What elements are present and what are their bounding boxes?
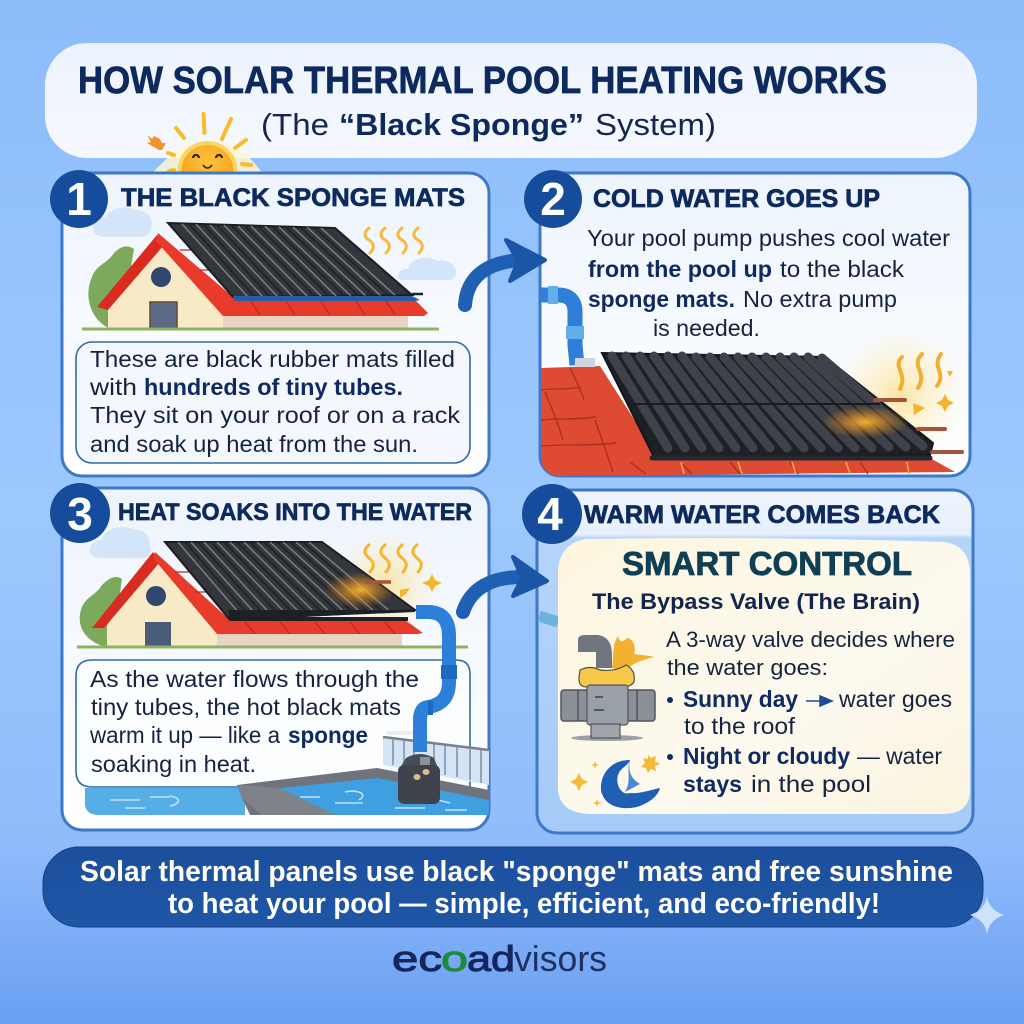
logo: ecoadvisors: visors bbox=[514, 938, 607, 979]
title: HOW SOLAR THERMAL POOL HEATING WORKS bbox=[78, 60, 887, 102]
flames bbox=[899, 354, 941, 389]
valve explanation: to the roof bbox=[684, 713, 796, 739]
red roof bbox=[541, 366, 955, 476]
body text 2 bbox=[587, 225, 950, 341]
valve explanation bbox=[666, 627, 955, 797]
badge 3 bbox=[50, 483, 110, 543]
text box 3: tiny tubes, the hot black mats bbox=[91, 694, 401, 720]
valve explanation: in the pool bbox=[751, 771, 871, 797]
house illustration bbox=[77, 542, 468, 647]
card title: SMART CONTROL bbox=[622, 545, 912, 582]
text box 3: warm it up — like a bbox=[89, 722, 280, 748]
heading 4: WARM WATER COMES BACK bbox=[584, 501, 940, 529]
logo: ecoadvisors: ad bbox=[467, 938, 515, 979]
card subtitle: The Bypass Valve (The Brain) bbox=[592, 589, 920, 614]
pump bbox=[398, 754, 440, 804]
badge 2: 2 bbox=[540, 173, 566, 225]
cloud bbox=[90, 527, 151, 558]
solar mat panel bbox=[602, 353, 962, 459]
badge 4 bbox=[522, 484, 582, 544]
badge 2 bbox=[524, 170, 582, 228]
text box 1: They sit on your roof or on a rack bbox=[90, 402, 461, 428]
valve explanation: water goes bbox=[838, 686, 952, 712]
subtitle bbox=[261, 107, 716, 142]
valve explanation: the water goes: bbox=[667, 655, 828, 680]
subtitle: System) bbox=[595, 107, 716, 142]
body text 2: to the black bbox=[780, 256, 905, 282]
text box 3 bbox=[76, 660, 470, 787]
body text 2: No extra pump bbox=[743, 286, 897, 312]
body text 2: is needed. bbox=[653, 315, 760, 341]
valve explanation: A 3-way valve decides where bbox=[666, 627, 955, 652]
arrow: step 1 to step 2 bbox=[465, 240, 545, 305]
subtitle: (The bbox=[261, 107, 329, 142]
cloud left bbox=[93, 208, 152, 237]
valve explanation: Night or cloudy bbox=[683, 743, 850, 769]
arrow: step 3 to step 4 bbox=[463, 557, 547, 612]
text box 3: sponge bbox=[288, 722, 368, 748]
panel 2: cold water goes up bbox=[524, 170, 970, 476]
valve explanation: Sunny day bbox=[683, 686, 798, 712]
return pipe bbox=[416, 612, 457, 752]
heading 1: THE BLACK SPONGE MATS bbox=[121, 184, 465, 212]
sparkle bbox=[400, 574, 442, 598]
heat glow bbox=[330, 530, 440, 640]
subtitle: “Black Sponge” bbox=[339, 107, 584, 142]
header panel bbox=[45, 43, 977, 158]
moon icon bbox=[570, 755, 660, 808]
valve explanation: stays bbox=[683, 771, 742, 797]
heat glow bbox=[846, 337, 958, 442]
footer banner bbox=[43, 847, 983, 927]
sun icon bbox=[147, 112, 261, 172]
text box 3: As the water flows through the bbox=[90, 666, 419, 692]
badge 4: 4 bbox=[537, 488, 563, 540]
text box 3: soaking in heat. bbox=[91, 751, 256, 777]
body text 2: from the pool up bbox=[588, 256, 772, 282]
text box 1: These are black rubber mats filled bbox=[90, 346, 455, 372]
panel 1: the black sponge mats bbox=[50, 170, 489, 476]
text box 1: and soak up heat from the sun. bbox=[90, 431, 418, 457]
pool and deck bbox=[85, 768, 489, 815]
badge 1 bbox=[50, 170, 108, 228]
badge 3: 3 bbox=[67, 488, 93, 540]
footer banner: Solar thermal panels use black "sponge" mats and free sunshine bbox=[80, 856, 953, 888]
text box 1: with bbox=[89, 374, 137, 400]
heading 3: HEAT SOAKS INTO THE WATER bbox=[118, 499, 472, 526]
panel 3: heat soaks into the water bbox=[50, 483, 489, 830]
heat waves bbox=[365, 228, 422, 253]
body text 2: sponge mats. bbox=[588, 286, 735, 312]
valve explanation: — water bbox=[857, 743, 942, 769]
house illustration bbox=[82, 223, 439, 329]
heat waves bbox=[365, 545, 421, 572]
body text 2: Your pool pump pushes cool water bbox=[587, 225, 950, 251]
logo: ecoadvisors bbox=[392, 938, 607, 979]
badge 1: 1 bbox=[66, 173, 92, 225]
inlet pipe bbox=[541, 286, 595, 367]
logo: ecoadvisors: ec bbox=[392, 938, 442, 979]
valve icon bbox=[561, 635, 655, 741]
sparkle bbox=[970, 896, 1004, 934]
heading 2: COLD WATER GOES UP bbox=[593, 185, 880, 213]
sparkles bbox=[913, 371, 954, 415]
panel 4: warm water comes back bbox=[522, 484, 973, 833]
logo: ecoadvisors: o bbox=[441, 938, 468, 979]
railing bbox=[383, 733, 489, 785]
smart control card bbox=[558, 538, 970, 814]
text box 1: hundreds of tiny tubes. bbox=[144, 374, 403, 400]
cloud right bbox=[398, 258, 456, 280]
text box 1 bbox=[76, 342, 470, 463]
footer banner: to heat your pool — simple, efficient, and eco-friendly! bbox=[168, 888, 880, 920]
